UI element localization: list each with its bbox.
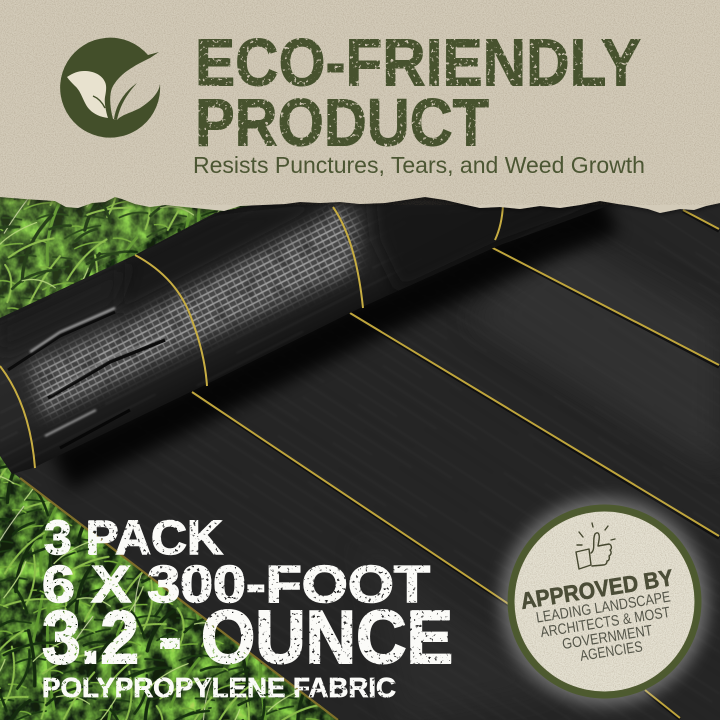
badge body text: AGENCIES bbox=[579, 638, 644, 665]
headline: pack specs: POLYPROPYLENE FABRIC bbox=[42, 672, 396, 703]
subtitle: Resists Punctures, Tears, and Weed Growth bbox=[193, 152, 645, 178]
photo: grass background bbox=[0, 190, 360, 720]
headline: pack specs: 3 PACK bbox=[44, 512, 223, 565]
badge body text: LEADING LANDSCAPE bbox=[535, 589, 672, 627]
icon: leaf logo bbox=[60, 38, 160, 138]
badge body text: ARCHITECTS & MOST bbox=[539, 604, 671, 641]
badge: approved by bbox=[500, 498, 708, 706]
title bbox=[195, 26, 641, 160]
badge body text: GOVERNMENT bbox=[561, 622, 654, 653]
photo: rolled fabric bbox=[0, 190, 620, 475]
headline: pack specs: 3.2 - OUNCE bbox=[42, 595, 453, 679]
badge heading: APPROVED BY bbox=[519, 564, 675, 614]
icon: thumbs up bbox=[576, 523, 615, 569]
fabric edge stripe bbox=[20, 478, 338, 720]
roll wrinkles bbox=[8, 312, 115, 370]
badge body text bbox=[535, 589, 672, 665]
photo: flat weed barrier fabric bbox=[0, 195, 720, 720]
title: ECO-FRIENDLY bbox=[195, 26, 641, 100]
headline: pack specs bbox=[42, 512, 453, 703]
fabric yellow stripes bbox=[192, 211, 719, 719]
roll yellow stripes bbox=[0, 205, 503, 468]
title: PRODUCT bbox=[195, 86, 489, 160]
panel: torn paper header bbox=[0, 0, 720, 213]
headline: pack specs: 6 X 300-FOOT bbox=[42, 556, 430, 614]
